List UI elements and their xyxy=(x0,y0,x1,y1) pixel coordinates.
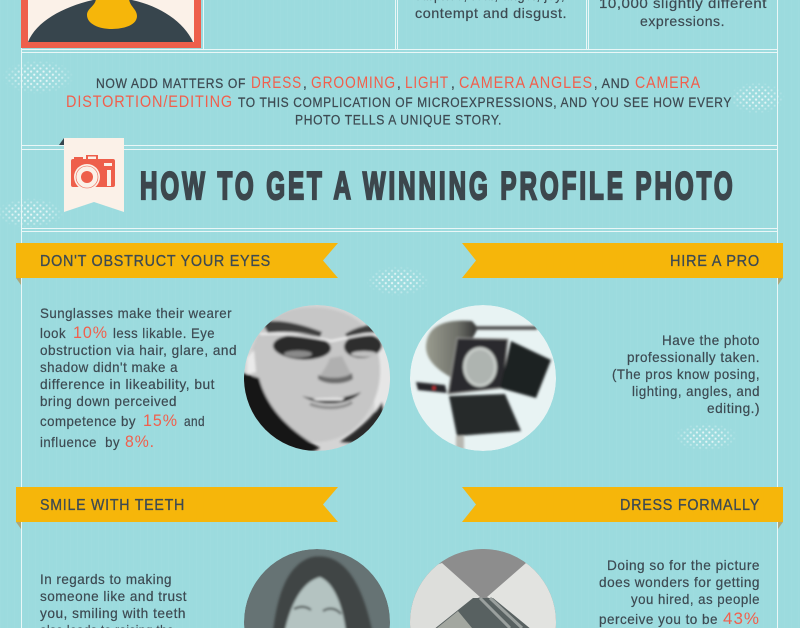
text block: add matters of dress: DRESS xyxy=(251,74,302,92)
text block: add matters of dress xyxy=(66,74,732,128)
banner: smile with teeth: SMILE WITH TEETH xyxy=(40,497,185,514)
text block: have the photo taken: Have the photo xyxy=(662,332,760,348)
photo: studio light xyxy=(410,305,556,456)
banner: don't obstruct your eyes: DON'T OBSTRUCT YOUR EYES xyxy=(40,253,271,270)
text block: sunglasses: Sunglasses make their wearer xyxy=(40,305,232,321)
text block: dress formally xyxy=(599,557,760,628)
text block: sunglasses: 8%. xyxy=(125,432,155,451)
text block: add matters of dress: NOW ADD MATTERS OF xyxy=(96,76,246,91)
text block: sunglasses: look xyxy=(40,325,66,341)
photo: shirt and tie xyxy=(405,549,560,628)
banner: dress formally xyxy=(462,487,783,529)
background xyxy=(0,62,782,449)
text block: add matters of dress: LIGHT xyxy=(405,74,449,92)
text block: sunglasses: less likable. Eye xyxy=(113,325,215,341)
text block: add matters of dress: , xyxy=(303,76,307,91)
text block: have the photo taken: editing.) xyxy=(707,400,760,416)
text block: smile with teeth: you, smiling with teeth xyxy=(40,605,186,621)
text block: have the photo taken: lighting, angles, and xyxy=(632,383,760,399)
text block: sunglasses: 15% xyxy=(143,411,178,430)
text block: smile with teeth: In regards to making xyxy=(40,571,172,587)
text block: add matters of dress: , xyxy=(397,76,401,91)
text block: sunglasses: shadow didn't make a xyxy=(40,359,178,375)
photo: man in sunglasses xyxy=(244,305,390,451)
text block: have the photo taken xyxy=(612,332,760,416)
text block: smile with teeth xyxy=(40,571,187,628)
text block: add matters of dress: TO THIS COMPLICATION OF MICROEXPRESSIONS, AND YOU SEE HOW EVERY xyxy=(238,95,732,110)
text block: add matters of dress: DISTORTION/EDITING xyxy=(66,93,233,111)
text: end of expressions column: contempt and disgust. xyxy=(415,5,567,21)
text block: have the photo taken: (The pros know posing, xyxy=(612,366,760,382)
text block: sunglasses: competence by xyxy=(40,413,136,429)
text block: sunglasses: influence by xyxy=(40,434,120,450)
text block: add matters of dress: PHOTO TELLS A UNIQUE STORY. xyxy=(295,112,502,128)
icon: camera xyxy=(71,155,115,190)
text block: sunglasses: 10% xyxy=(73,323,108,342)
text block: sunglasses xyxy=(40,305,237,451)
text block: smile with teeth: someone like and trust xyxy=(40,588,187,604)
text block: dress formally: you hired, as people xyxy=(631,591,760,607)
icon: camera bookmark xyxy=(59,138,124,212)
text block: dress formally: does wonders for getting xyxy=(599,574,760,590)
text block: add matters of dress: GROOMING xyxy=(311,74,396,92)
panel: portrait illustration xyxy=(21,0,201,48)
title: HOW TO GET A WINNING PROFILE PHOTO xyxy=(140,164,733,207)
banner: smile with teeth xyxy=(16,487,338,529)
text: microexpressions column: expressions. xyxy=(640,13,725,29)
text block: sunglasses: difference in likeability, but xyxy=(40,376,215,392)
text block: dress formally: 43% xyxy=(723,609,760,628)
text block: add matters of dress: , xyxy=(451,76,455,91)
banner: dress formally: DRESS FORMALLY xyxy=(620,497,760,514)
text block: sunglasses: and xyxy=(184,413,205,429)
text block: add matters of dress: CAMERA xyxy=(635,74,701,92)
text block: sunglasses: bring down perceived xyxy=(40,393,177,409)
text block: dress formally: perceive you to be xyxy=(599,611,718,627)
text block: dress formally: Doing so for the picture xyxy=(607,557,760,573)
text block: have the photo taken: professionally taken. xyxy=(627,349,760,365)
text block: add matters of dress: , AND xyxy=(594,76,630,91)
text block: sunglasses: obstruction via hair, glare, and xyxy=(40,342,237,358)
text: microexpressions column xyxy=(599,0,767,29)
banner: don't obstruct your eyes xyxy=(16,243,338,285)
banner: hire a pro xyxy=(462,243,783,285)
banner: hire a pro: HIRE A PRO xyxy=(670,253,760,270)
text block: add matters of dress: CAMERA ANGLES xyxy=(459,74,593,92)
photo: smiling woman xyxy=(244,549,390,628)
